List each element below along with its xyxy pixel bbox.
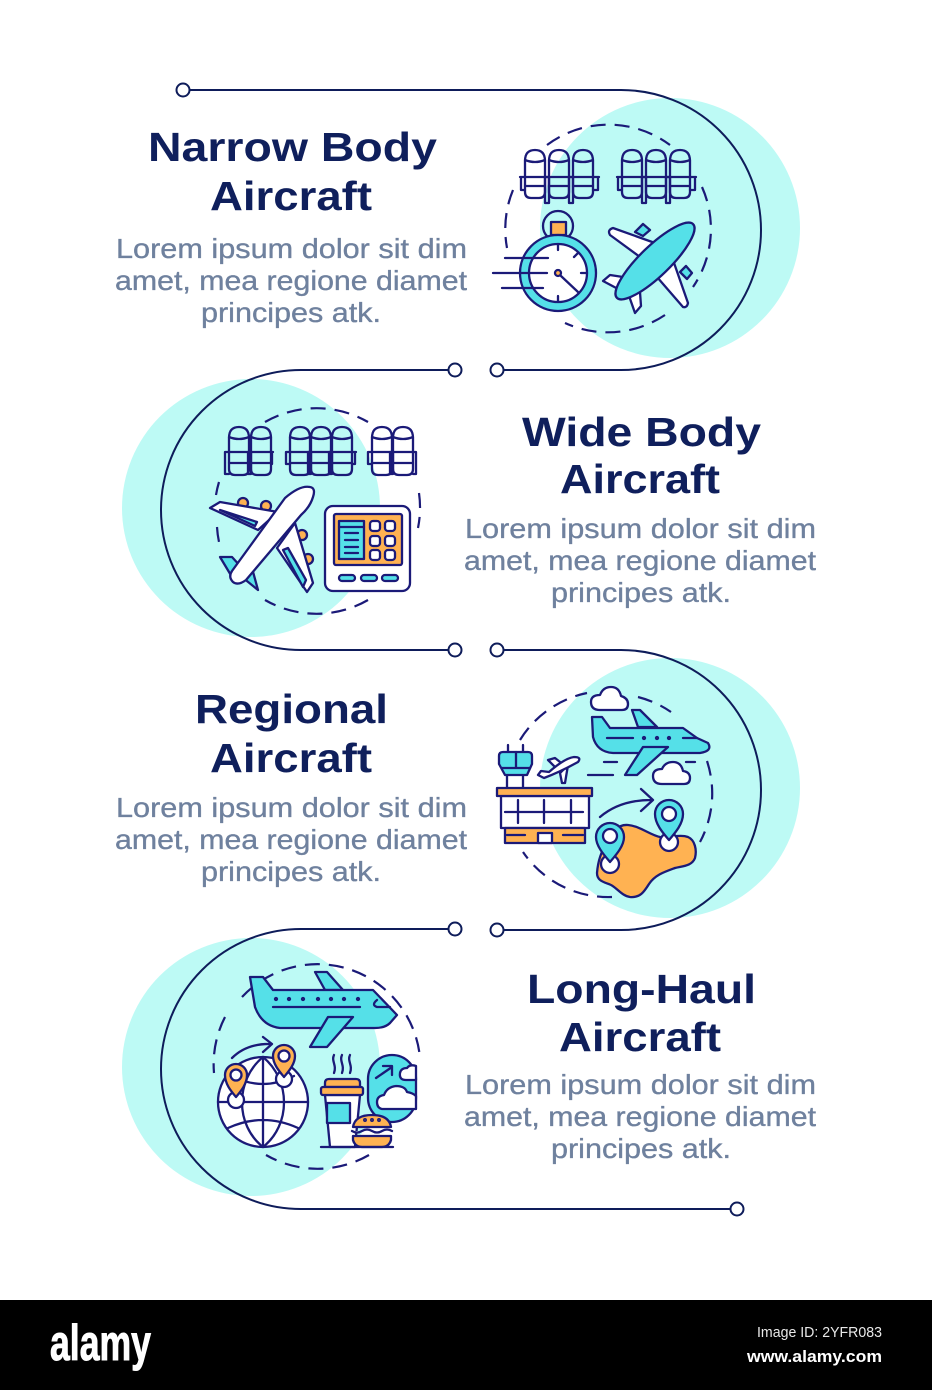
title: Regional Aircraft: Regional bbox=[195, 686, 388, 732]
airplane window bbox=[368, 1055, 416, 1122]
body text 3 bbox=[115, 792, 467, 887]
footer image id: Image ID: 2YFR083 bbox=[757, 1324, 882, 1341]
icon: narrow body aircraft bbox=[493, 125, 711, 332]
teal blob 4 bbox=[122, 938, 380, 1196]
island with pins bbox=[596, 800, 696, 897]
clouds bbox=[591, 687, 690, 784]
footer url: www.alamy.com bbox=[746, 1348, 882, 1366]
body text 3: Lorem ipsum dolor sit dim bbox=[116, 792, 467, 823]
title: Wide Body Aircraft: Aircraft bbox=[560, 456, 720, 502]
title: Long-Haul Aircraft: Aircraft bbox=[559, 1014, 721, 1060]
title: Narrow Body Aircraft: Narrow Body bbox=[148, 124, 437, 170]
connector line 4 bbox=[161, 922, 744, 1216]
title: Narrow Body Aircraft bbox=[148, 124, 437, 219]
title: Regional Aircraft bbox=[195, 686, 388, 781]
teal blob 2 bbox=[122, 379, 380, 637]
body text 1: amet, mea regione diamet bbox=[115, 265, 467, 296]
route arrow bbox=[600, 789, 653, 817]
title: Regional Aircraft: Aircraft bbox=[210, 735, 372, 781]
small plane bbox=[538, 757, 579, 783]
body text 2: amet, mea regione diamet bbox=[464, 545, 816, 576]
footer band bbox=[0, 1300, 932, 1390]
teal blob 3 bbox=[540, 658, 800, 918]
regional plane bbox=[588, 710, 709, 775]
title: Narrow Body Aircraft: Aircraft bbox=[210, 173, 372, 219]
long-haul plane bbox=[250, 972, 397, 1047]
body text 4: principes atk. bbox=[551, 1133, 731, 1164]
wide body plane bbox=[210, 487, 314, 592]
icon: long-haul aircraft bbox=[214, 964, 420, 1169]
body text 1 bbox=[115, 233, 467, 328]
seats rows bbox=[225, 427, 416, 475]
terminal building bbox=[497, 788, 592, 843]
connector line 1 bbox=[176, 84, 761, 376]
icon: regional aircraft bbox=[497, 687, 712, 897]
title: Wide Body Aircraft bbox=[522, 409, 761, 502]
body text 2: principes atk. bbox=[551, 577, 731, 608]
globe with pins bbox=[218, 1037, 308, 1147]
body text 1: Lorem ipsum dolor sit dim bbox=[116, 233, 467, 264]
burger bbox=[321, 1115, 393, 1147]
body text 4 bbox=[464, 1069, 816, 1164]
control tower bbox=[499, 745, 532, 787]
body text 3: principes atk. bbox=[201, 856, 381, 887]
icon: wide body aircraft bbox=[210, 408, 420, 614]
flight panel bbox=[325, 506, 410, 591]
body text 4: Lorem ipsum dolor sit dim bbox=[465, 1069, 816, 1100]
body text 1: principes atk. bbox=[201, 297, 381, 328]
seats row left bbox=[520, 150, 599, 203]
title: Long-Haul Aircraft: Long-Haul bbox=[527, 966, 756, 1012]
connector line 2 bbox=[161, 364, 462, 656]
narrow body plane bbox=[603, 213, 704, 313]
body text 2 bbox=[464, 513, 816, 608]
stopwatch bbox=[493, 211, 596, 311]
seats row right bbox=[617, 150, 696, 203]
body text 3: amet, mea regione diamet bbox=[115, 824, 467, 855]
footer logo: alamy bbox=[50, 1315, 151, 1371]
body text 2: Lorem ipsum dolor sit dim bbox=[465, 513, 816, 544]
title: Long-Haul Aircraft bbox=[527, 966, 756, 1060]
title: Wide Body Aircraft: Wide Body bbox=[522, 409, 761, 455]
connector line 3 bbox=[490, 644, 761, 936]
teal blob 1 bbox=[540, 98, 800, 358]
body text 4: amet, mea regione diamet bbox=[464, 1101, 816, 1132]
coffee cup bbox=[321, 1055, 363, 1147]
